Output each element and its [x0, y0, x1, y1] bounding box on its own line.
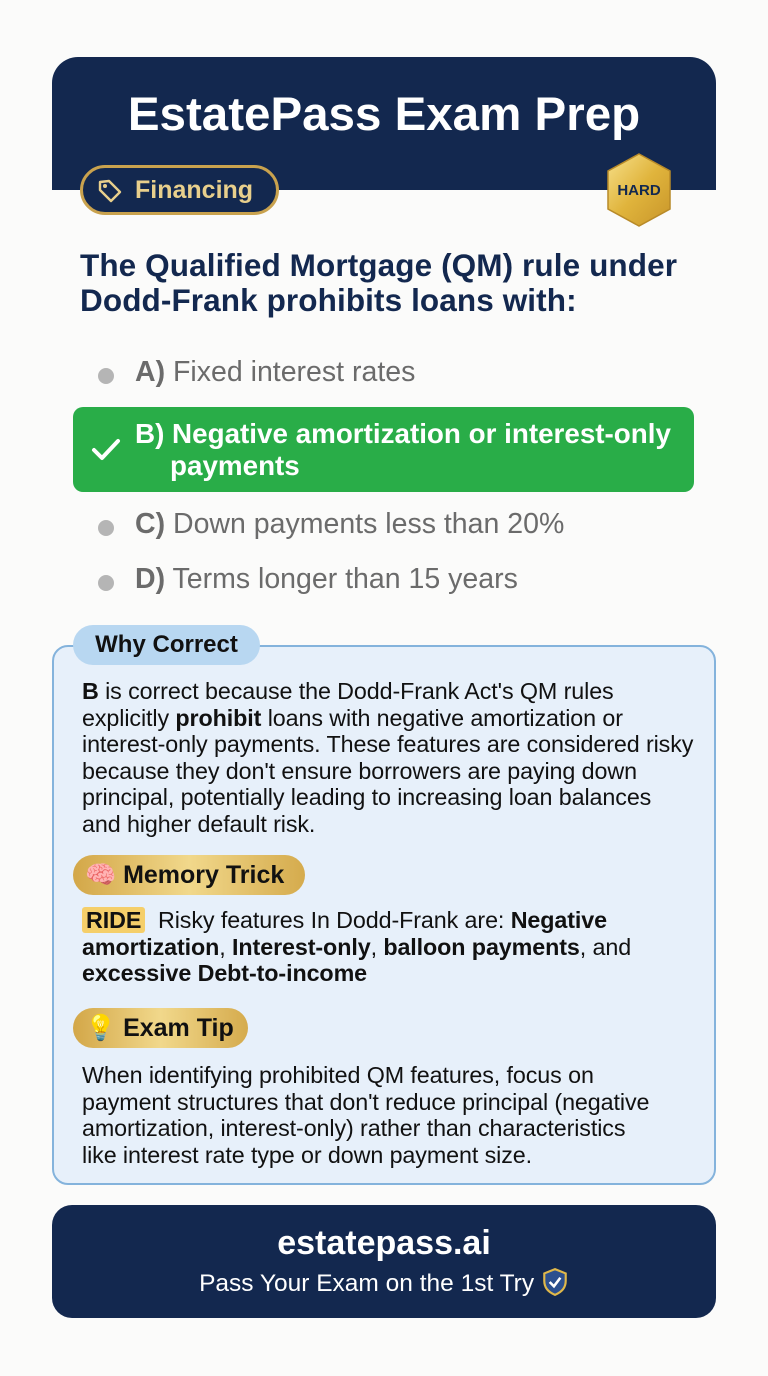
explanation panel	[52, 645, 716, 1185]
option B correct: payments	[170, 450, 300, 481]
question: Dodd-Frank prohibits loans with:	[80, 282, 577, 318]
title: EstatePass Exam Prep	[128, 88, 640, 141]
why correct text: because they don't ensure borrowers are paying down	[82, 758, 637, 784]
badge: HARD: HARD	[617, 182, 661, 199]
option D	[98, 563, 518, 595]
heading: Why Correct: Why Correct	[95, 631, 238, 658]
memory trick text: excessive Debt-to-income	[82, 960, 367, 986]
option B correct: B) Negative amortization or interest-only	[135, 418, 671, 449]
exam tip text: like interest rate type or down payment size.	[82, 1142, 532, 1168]
icon: tag	[98, 180, 122, 202]
option A	[98, 356, 415, 388]
exam tip text: payment structures that don't reduce principal (negative	[82, 1088, 649, 1114]
exam tip text: When identifying prohibited QM features, focus on	[82, 1062, 594, 1088]
heading: Why Correct	[73, 625, 260, 665]
why correct text: principal, potentially leading to increasing loan balances	[82, 784, 651, 810]
heading: Memory Trick	[73, 855, 305, 895]
why correct text: explicitly prohibit loans with negative amortization or	[82, 704, 623, 730]
memory trick text	[82, 907, 631, 986]
icon: check	[92, 438, 120, 460]
heading: Exam Tip	[73, 1008, 248, 1048]
exam tip text: amortization, interest-only) rather than characteristics	[82, 1115, 625, 1141]
category pill: Financing	[80, 165, 279, 215]
why correct text: and higher default risk.	[82, 810, 315, 836]
text: C) Down payments less than 20%	[135, 508, 564, 540]
footer	[52, 1205, 716, 1318]
why correct text: interest-only payments. These features are considered risky	[82, 731, 693, 757]
memory trick text: RIDE Risky features In Dodd-Frank are: Negative	[86, 907, 607, 933]
footer tagline: Pass Your Exam on the 1st Try	[199, 1270, 534, 1297]
exam tip text	[82, 1062, 649, 1168]
text: D) Terms longer than 15 years	[135, 563, 518, 595]
heading: Memory Trick: 🧠 Memory Trick	[85, 861, 284, 889]
header panel	[52, 57, 716, 190]
option B correct	[73, 407, 694, 492]
option C	[98, 508, 564, 540]
category pill: Financing: Financing	[135, 176, 253, 204]
footer brand: estatepass.ai	[277, 1224, 491, 1262]
question: The Qualified Mortgage (QM) rule under	[80, 247, 677, 283]
badge: HARD	[607, 153, 671, 227]
memory trick text: amortization, Interest-only, balloon payments, and	[82, 934, 631, 960]
why correct text	[82, 678, 694, 837]
heading: Exam Tip: 💡 Exam Tip	[85, 1014, 234, 1042]
question	[80, 247, 677, 318]
text: A) Fixed interest rates	[135, 356, 415, 388]
why correct text: B is correct because the Dodd-Frank Act's QM rules	[82, 678, 614, 704]
